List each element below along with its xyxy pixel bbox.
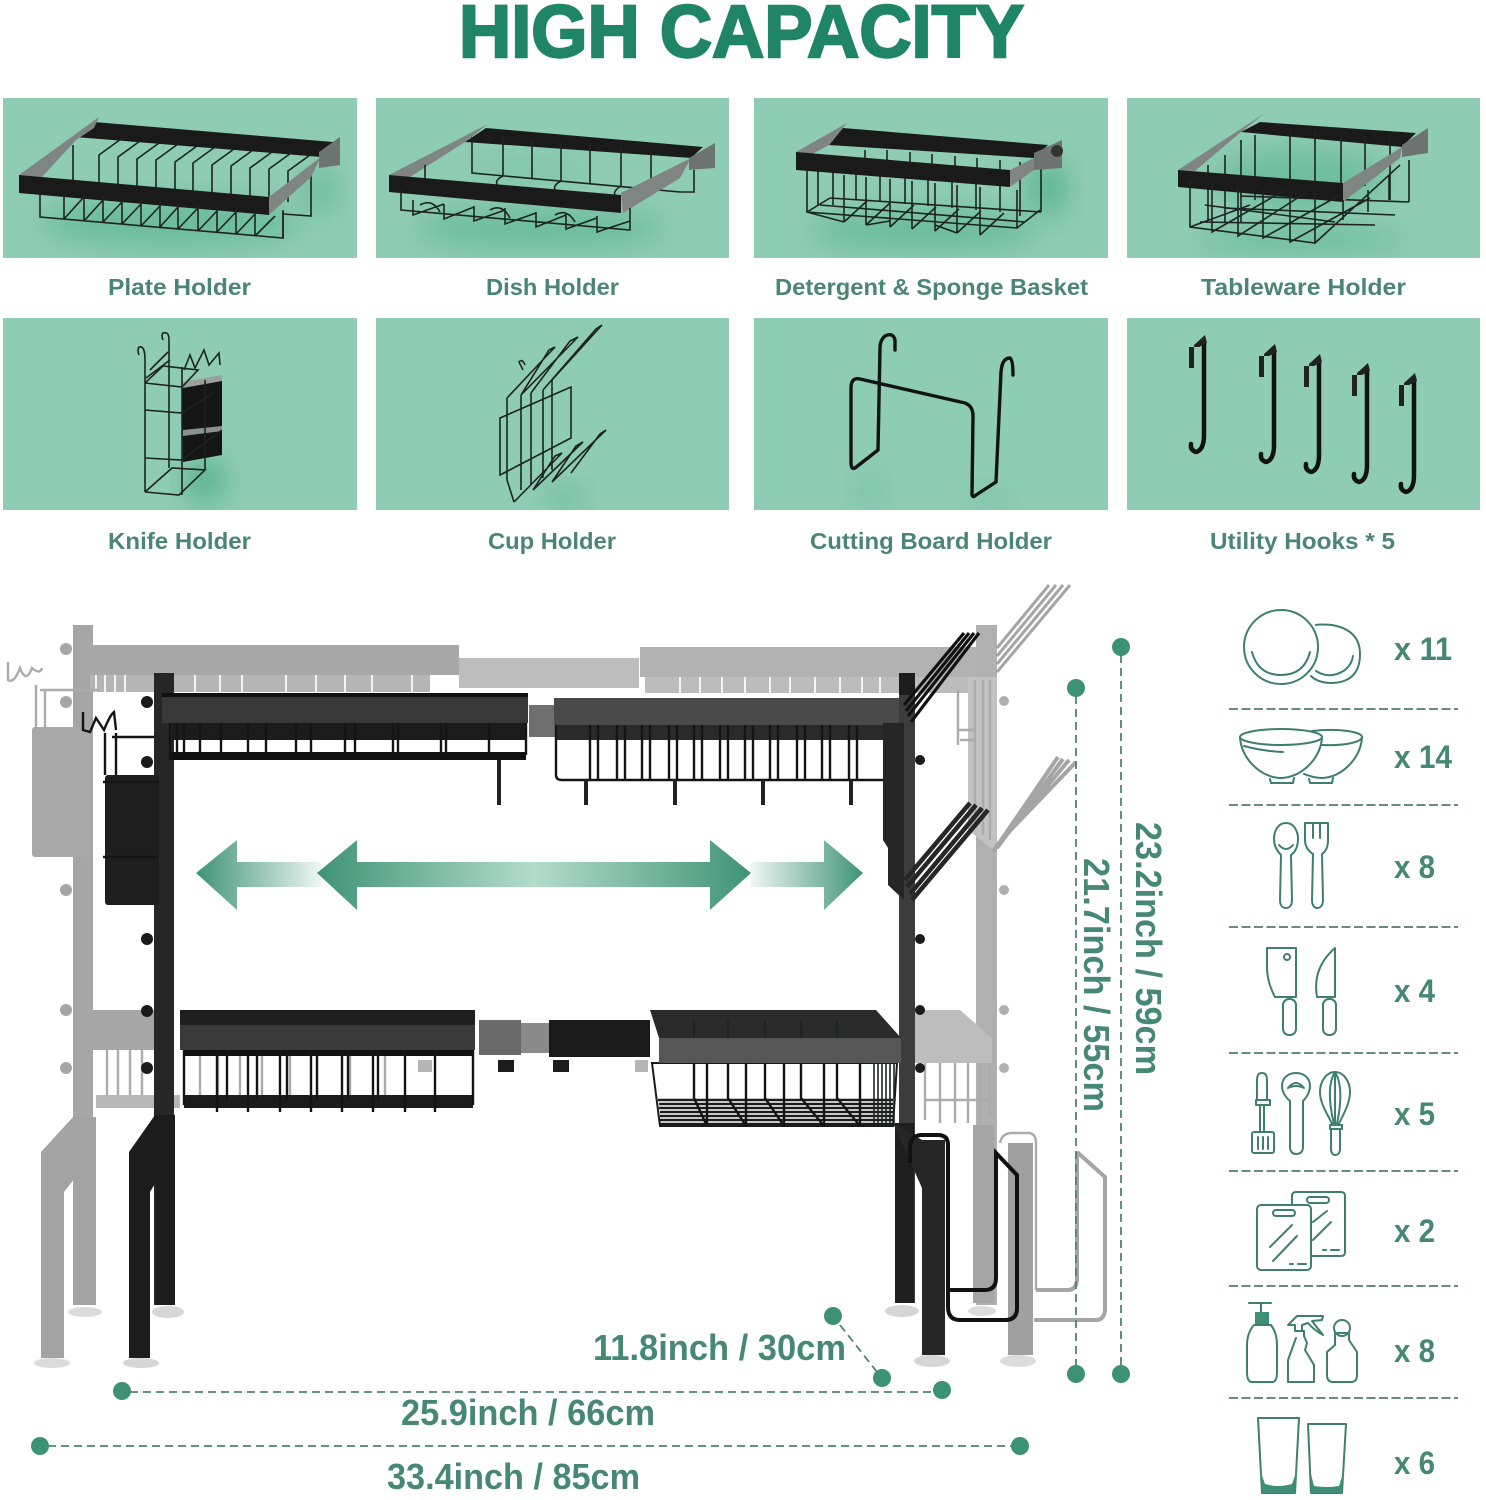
capacity: glasses x 6 [1258,1418,1435,1493]
dimension: 25.9inch width [113,1381,951,1433]
panel: cutting board holder [754,318,1108,554]
label: tableware holder: Tableware Holder [1201,274,1406,300]
capacity: utensils x 5: x 5 [1394,1096,1435,1132]
capacity: plates x 11: x 11 [1394,631,1452,667]
capacity: plates x 11 [1244,610,1452,684]
label: plate holder: Plate Holder [108,274,251,300]
dimension: 11.8inch depth: 11.8inch / 30cm [593,1327,846,1368]
panel: dish holder [376,98,729,300]
dimension: 21.7inch height: 21.7inch / 55cm [1076,858,1117,1112]
arrow: outer right [751,840,863,910]
label: cutting board holder: Cutting Board Holder [810,528,1052,554]
panel: cup holder [376,318,729,554]
rack diagram [8,585,1105,1368]
label: knife holder: Knife Holder [108,528,251,554]
label: utility hooks: Utility Hooks * 5 [1210,528,1395,554]
dimension: 23.2inch height [1112,638,1169,1383]
capacity: cutting boards x 2 [1257,1192,1435,1270]
ghost rack: extended position [8,585,1105,1368]
panel: knife holder [3,318,357,554]
black top left shelf [162,693,528,805]
capacity: bowls x 14: x 14 [1394,739,1452,775]
capacity: cutlery x 8 [1274,823,1435,908]
dimension: 11.8inch depth [593,1307,891,1387]
capacity: knives x 4: x 4 [1394,973,1435,1009]
black top right shelf [554,698,904,805]
dimension: 23.2inch height: 23.2inch / 59cm [1128,822,1169,1075]
capacity: cutlery x 8: x 8 [1394,849,1435,885]
capacity: bowls x 14 [1240,729,1452,783]
dimension: 33.4inch width [31,1437,1029,1497]
center rods [479,705,650,1072]
label: dish holder: Dish Holder [486,274,619,300]
capacity: glasses x 6: x 6 [1394,1445,1435,1481]
capacity: utensils x 5 [1252,1072,1435,1155]
capacity: cutting boards x 2: x 2 [1394,1213,1435,1249]
dimension: 33.4inch width: 33.4inch / 85cm [387,1456,640,1497]
label: detergent basket: Detergent & Sponge Basket [775,274,1088,300]
label: cup holder: Cup Holder [488,528,616,554]
panel: utility hooks [1127,318,1480,554]
black rack left side [83,673,184,1368]
dimension: 25.9inch width: 25.9inch / 66cm [401,1392,655,1433]
black lower right basket [650,1010,901,1126]
panel: plate holder [3,98,357,300]
arrow: outer left [196,840,321,910]
capacity: cleaning bottles x 8 [1247,1303,1435,1382]
black lower left shelf [180,1010,475,1112]
dimension: 21.7inch height [1067,679,1117,1383]
panel: tableware holder [1127,98,1480,300]
arrow: center double [317,840,751,910]
panel: detergent and sponge basket [754,98,1108,300]
black rack right side [883,633,1017,1367]
capacity: knives x 4 [1267,948,1435,1035]
capacity: cleaning bottles x 8: x 8 [1394,1333,1435,1369]
